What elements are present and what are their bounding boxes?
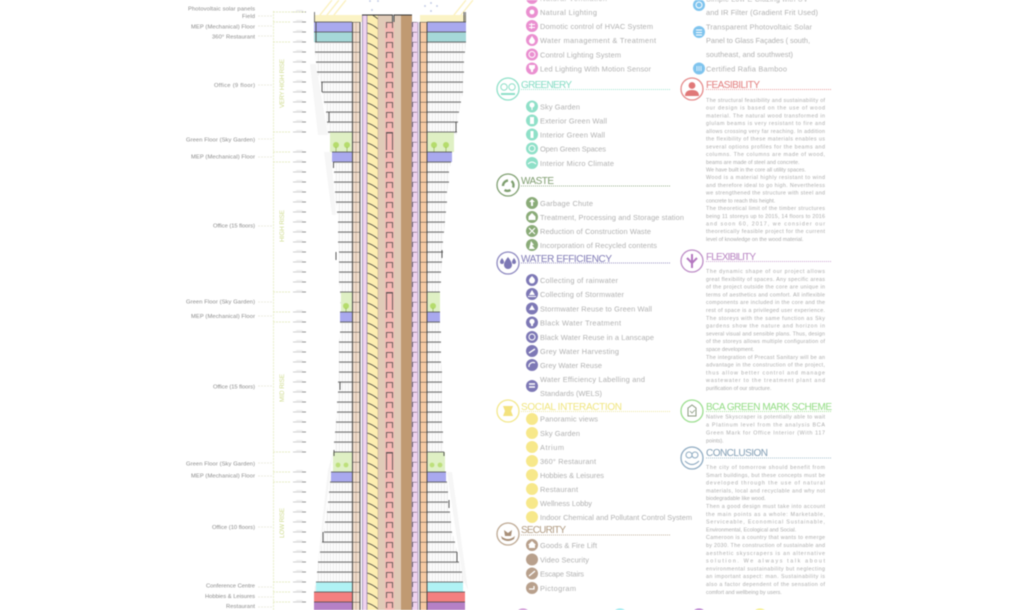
text: feasibility paragraph: Wood is a material highly resistant to wind [706, 175, 825, 181]
item: collecting rainwater: Collecting of rainwater [540, 276, 619, 285]
floor labels: MEP (Mechanical) Floor [191, 154, 255, 160]
text: feasibility paragraph: allows crossing very far reaching. In addition [706, 129, 825, 135]
text: conclusion paragraph: Serviceable, Economical Sustainable, [706, 520, 826, 526]
item: photovoltaic panels: southeast, and southwest) [706, 50, 793, 59]
item: 360 restaurant: 360° Restaurant [540, 457, 596, 466]
text: feasibility paragraph: the flexibility of these materials enables us [706, 137, 825, 143]
panel: social interaction [497, 400, 692, 523]
icon: water drops badge [497, 252, 519, 274]
item: wellness lobby [526, 497, 592, 509]
item: indoor chemical control: Indoor Chemical and Pollutant Control System [540, 513, 692, 522]
heading: flexibility: FLEXIBILITY [706, 252, 756, 263]
text: BCA paragraph [706, 414, 826, 444]
item: WELS standards: Water Efficiency Labelling and [540, 375, 645, 384]
floor slab lines [314, 12, 466, 602]
panel: greenery [497, 78, 670, 169]
item: black water treatment: Black Water Treatment [540, 318, 621, 328]
item: sky garden [526, 427, 580, 439]
item: escape stairs [526, 568, 584, 580]
item: natural lighting: Natural Lighting [540, 8, 597, 17]
item: open green spaces [526, 142, 606, 154]
floor labels: MEP (Mechanical) Floor [191, 314, 255, 320]
heading: conclusion: CONCLUSION [706, 448, 768, 459]
text: conclusion paragraph: comfort and wellbeing by users. [706, 590, 782, 596]
cropped badges at the bottom edge [514, 608, 768, 610]
text: feasibility paragraph: columns. The columns are made of wood, [706, 152, 826, 158]
text: flexibility paragraph: terms of aesthetics and comfort. All inflexible [706, 292, 825, 298]
label leader lines [258, 16, 273, 607]
text: flexibility paragraph: The integration of Precast Sanitary will be an [706, 355, 825, 361]
item: domotic control: Domotic control of HVAC System [540, 22, 653, 31]
zone labels: HIGH RISE [279, 210, 286, 242]
floor labels: Green Floor (Sky Garden) [186, 300, 255, 306]
text: feasibility paragraph: our design is based on the use of wood [706, 106, 825, 112]
item: stormwater reuse: Stormwater Reuse to Green Wall [540, 304, 652, 314]
item: pictogram [526, 582, 576, 594]
item: hobbies and leisures: Hobbies & Leisures [540, 471, 604, 480]
text: flexibility paragraph: The dynamic shape of our project allows [706, 269, 825, 275]
item: collecting stormwater [526, 288, 625, 300]
item: black water reuse: Black Water Reuse in a Lanscape [540, 333, 654, 342]
panel: BCA green mark scheme [681, 400, 832, 444]
text: conclusion paragraph: an important aspect: man. Sustainability is [706, 574, 825, 580]
panel: security [497, 523, 670, 594]
item: WELS standards: Standards (WELS) [540, 389, 602, 398]
text: flexibility paragraph: of the project outside the core are unique in [706, 285, 825, 291]
text: conclusion paragraph: biodegradable like wood. [706, 496, 766, 502]
zone labels: VERY HIGH RISE [279, 59, 286, 108]
text: conclusion paragraph: developed through the use of natural [706, 481, 825, 487]
text: feasibility paragraph: The structural feasibility and sustainability of [706, 98, 826, 104]
text: feasibility paragraph: concrete to reach this height. [706, 198, 775, 204]
item: video security: Video Security [540, 556, 589, 564]
item: goods and fire lift [526, 539, 597, 551]
floor labels: Hobbies & Leisures [205, 594, 255, 600]
text: BCA paragraph: Native Skyscraper is potentially able to wait [706, 414, 826, 420]
solar panel field and sun rays [314, 0, 473, 22]
text: flexibility paragraph: wastewater to the treatment plant and [705, 378, 825, 384]
panel: energy list (pink) [526, 0, 656, 74]
text: feasibility paragraph: being 11 storeys up to 2015, 14 floors to 2016 [706, 214, 825, 220]
text: feasibility paragraph: beams are made of steel and concrete. [706, 160, 800, 166]
item: treatment station: Treatment, Processing and Storage station [540, 213, 684, 222]
floor labels: MEP (Mechanical) Floor [191, 474, 255, 480]
text: flexibility paragraph: several visual and sensible plans. Thus, design [706, 331, 825, 337]
panel: building section [186, 0, 473, 610]
icon: hands badge [681, 447, 703, 469]
item: stormwater reuse [526, 302, 652, 314]
zone bracket line and ticks [273, 11, 306, 610]
item: photovoltaic panels: Transparent Photovoltaic Solar [706, 22, 813, 32]
floor labels [186, 6, 255, 610]
floor labels: Office (9 floor) [214, 83, 255, 89]
text: flexibility paragraph: purification of our structure. [706, 386, 771, 392]
item: collecting stormwater: Collecting of Stormwater [540, 290, 625, 299]
item: black water treatment [526, 316, 621, 328]
item: recycled contents [526, 239, 657, 251]
heading: water efficiency: WATER EFFICIENCY [521, 254, 612, 265]
text: feasibility paragraph: material. The natural wood transformed in [706, 113, 825, 119]
text: conclusion paragraph: Cameroon is a country that wants to emerge [706, 535, 825, 541]
text: BCA paragraph: a Platinum level from the analysis BCA [706, 422, 825, 428]
item: recycled contents: Incorporation of Recycled contents [540, 241, 657, 250]
item: sky garden: Sky Garden [540, 429, 580, 438]
item: construction waste [526, 225, 651, 237]
icon: certificate badge [681, 400, 703, 422]
floor labels: Field [242, 14, 255, 20]
item: grey water reuse: Grey Water Reuse [540, 361, 602, 370]
text: feasibility paragraph: and soon 60, 2017, we consider our [706, 222, 825, 228]
item: 360 restaurant [526, 455, 596, 467]
text: flexibility paragraph: of the storeys allows multiple configuration of [706, 339, 826, 345]
item: atrium: Atrium [540, 443, 564, 452]
zone labels: MID RISE [279, 374, 286, 402]
text: conclusion paragraph: aesthetic skyscrapers is an alternative [706, 551, 825, 557]
floor labels: Green Floor (Sky Garden) [186, 138, 255, 144]
panel: materials list (blue) [693, 0, 818, 74]
text: conclusion paragraph: by 2030. The construction of sustainable and [706, 543, 825, 549]
text: feasibility paragraph: theoretically feasible project for the current [706, 229, 826, 235]
item: escape stairs: Escape Stairs [540, 570, 584, 578]
text: conclusion paragraph: the main points as a whole: Marketable, [706, 512, 826, 518]
floor labels: Office (15 floors) [213, 224, 255, 230]
item: open green spaces: Open Green Spaces [540, 144, 606, 154]
item: atrium [526, 441, 564, 453]
item: hobbies and leisures [526, 469, 604, 481]
item: grey water harvesting [526, 345, 619, 357]
text: conclusion paragraph: Smart buildings, but these concepts must be [706, 473, 825, 479]
sky garden 1 and MEP floor [330, 132, 454, 162]
item: led lighting: Led Lighting With Motion Sensor [540, 64, 652, 74]
item: sky garden [526, 100, 580, 112]
item: exterior green wall: Exterior Green Wall [540, 116, 607, 126]
item: panoramic views: Panoramic views [540, 414, 598, 424]
item: restaurant [526, 483, 578, 495]
text: feasibility paragraph [705, 98, 826, 243]
floor labels: Green Floor (Sky Garden) [186, 462, 255, 468]
text: conclusion paragraph: The city of tomorrow should benefit from [706, 465, 826, 471]
text: feasibility paragraph: The theoretical limit of the timber structures [706, 206, 825, 212]
icon: recycling badge [497, 174, 519, 196]
text: conclusion paragraph: also a factor dependent of the sensation of [706, 582, 826, 588]
heading: security: SECURITY [521, 525, 566, 536]
text: feasibility paragraph: several options profiles for the beams and [706, 144, 825, 150]
item: pictogram: Pictogram [540, 584, 576, 593]
floor labels: Office (15 floors) [213, 384, 255, 390]
icon: arrows badge [681, 250, 703, 272]
icon: greenery badge [497, 78, 519, 100]
panel: flexibility [681, 250, 832, 392]
item: sky garden: Sky Garden [540, 102, 580, 112]
item: interior micro climate [526, 157, 614, 169]
item: grey water reuse [526, 359, 602, 371]
icon: engineer badge [681, 78, 703, 100]
text: flexibility paragraph: space development. [706, 347, 754, 353]
text: flexibility paragraph: gardens show the nature and horizon in [706, 324, 825, 330]
item: indoor chemical control [526, 511, 692, 523]
item: construction waste: Reduction of Construction Waste [540, 227, 651, 236]
icon: security badge [497, 523, 519, 545]
text: feasibility paragraph: glulam beams is very resistant to fire and [706, 121, 825, 127]
sky garden 2 and MEP floor [340, 292, 440, 322]
panel: conclusion [681, 447, 832, 596]
service core columns [352, 15, 427, 610]
left wing facade [314, 22, 352, 610]
item: water management: Water management & Treatment [540, 36, 656, 45]
text: feasibility paragraph: and therefore ideal to go high. Nevertheless [706, 183, 825, 189]
heading: waste: WASTE [521, 176, 554, 187]
floor labels: Office (10 floors) [212, 525, 255, 531]
heading: BCA green mark scheme: BCA GREEN MARK SCHEME [706, 402, 832, 413]
item: control lighting: Control Lighting System [540, 50, 621, 60]
item: black water reuse [526, 331, 654, 343]
text: feasibility paragraph: we strengthened the structure with steel and [705, 191, 825, 197]
text: conclusion paragraph: materials, local and recyclable and why not [706, 488, 826, 494]
heading: feasibility: FEASIBILITY [706, 80, 760, 91]
item: photovoltaic panels: Panel to Glass Façades ( south, [706, 36, 810, 45]
text: flexibility paragraph: components are included in the core and the [706, 300, 825, 306]
text: conclusion paragraph: Then a good design must take into account [706, 504, 826, 510]
text: flexibility paragraph [705, 269, 826, 392]
item: panoramic views [526, 413, 598, 425]
text: conclusion paragraph: environmental sustainability but neglecting [706, 566, 825, 572]
floor labels: Conference Centre [206, 584, 255, 590]
text: conclusion paragraph: solution. We always talk about [706, 559, 826, 565]
item: low-E glazing [693, 0, 818, 17]
item: wellness lobby: Wellness Lobby [540, 499, 592, 508]
item: garbage chute: Garbage Chute [540, 199, 593, 208]
right wing facade [427, 22, 466, 610]
item: video security [526, 554, 589, 566]
item: exterior green wall [526, 114, 607, 126]
panel: waste [497, 174, 684, 251]
text: flexibility paragraph: advantage in the construction of the project, [706, 363, 826, 369]
zone labels [279, 59, 286, 538]
item: interior micro climate: Interior Micro Climate [540, 159, 614, 168]
icon: social badge [497, 400, 519, 422]
item: interior green wall [526, 128, 605, 140]
floor labels: Restaurant [226, 604, 255, 610]
item: photovoltaic panels [693, 22, 813, 59]
item: interior green wall: Interior Green Wall [540, 130, 605, 140]
item: collecting rainwater [526, 274, 619, 286]
floor labels: Photovoltaic solar panels [188, 6, 255, 12]
text: flexibility paragraph: thus allow better control and manage [706, 370, 825, 376]
item: treatment station [526, 211, 684, 223]
text: flexibility paragraph: great flexibility of spaces. Any specific areas [706, 277, 825, 283]
text: feasibility paragraph: We have built in the core all utility spaces. [706, 168, 806, 174]
item: low-E glazing: and IR Filter (Gradient Frit Used) [706, 8, 818, 17]
ghost facade shading [310, 64, 468, 590]
heading: social interaction: SOCIAL INTERACTION [521, 402, 622, 413]
item: restaurant: Restaurant [540, 485, 578, 494]
text: flexibility paragraph: rest of space is a privileged user experience. [706, 308, 825, 314]
floor labels: 360° Restaurant [212, 34, 255, 40]
heading: greenery: GREENERY [521, 80, 572, 91]
podium: conference centre, hobbies, restaurant [314, 582, 465, 610]
MEP floor 1 and 360 restaurant [314, 22, 466, 42]
panel: water efficiency [497, 252, 670, 398]
item: WELS standards [526, 375, 645, 398]
sky garden 3 and MEP floor [331, 452, 446, 482]
text: BCA paragraph: points). [706, 438, 724, 444]
text: conclusion paragraph [706, 465, 826, 596]
panel: feasibility [681, 78, 832, 243]
zone labels: LOW RISE [279, 508, 286, 538]
item: garbage chute [526, 197, 593, 209]
text: feasibility paragraph: level of knowledge on the wood material. [706, 237, 803, 243]
floor labels: MEP (Mechanical) Floor [191, 24, 255, 30]
item: rafia bamboo: Certified Rafia Bamboo [706, 64, 787, 74]
floor level arrows [292, 7, 308, 610]
text: flexibility paragraph: The storeys with the same function as Sky [706, 316, 825, 322]
item: grey water harvesting: Grey Water Harvesting [540, 347, 619, 356]
text: conclusion paragraph: Environmental, Ecological and Social. [706, 527, 796, 533]
text: BCA paragraph: Green Mark for Office Interior (With 117 [706, 430, 825, 436]
item: goods and fire lift: Goods & Fire Lift [540, 541, 597, 550]
